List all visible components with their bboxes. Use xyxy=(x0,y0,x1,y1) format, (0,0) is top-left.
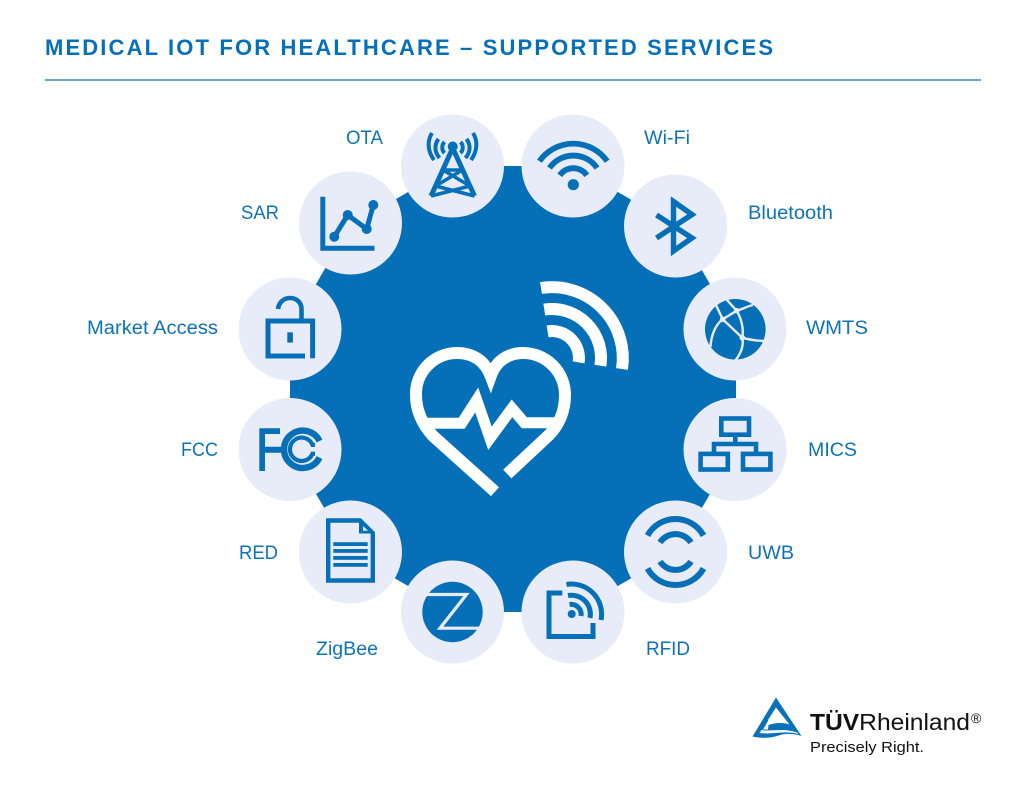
label: WMTS xyxy=(806,318,868,339)
tagline: Precisely Right. xyxy=(810,740,924,756)
service: Wi-Fi xyxy=(522,114,690,218)
service: SAR xyxy=(241,172,402,274)
label: UWB xyxy=(748,543,794,564)
label: FCC xyxy=(181,440,218,461)
icon: document xyxy=(328,519,374,580)
service: RED xyxy=(239,500,402,604)
icon: radio tower xyxy=(429,133,476,196)
service: RFID xyxy=(522,560,690,664)
icon: ultra-wideband arcs xyxy=(648,519,704,585)
label: MICS xyxy=(808,440,857,461)
service: Market Access xyxy=(87,278,342,380)
registered mark: ® xyxy=(971,710,982,726)
icon: network hierarchy xyxy=(701,418,770,470)
label: Wi-Fi xyxy=(644,128,690,149)
icon: line chart xyxy=(323,197,378,248)
service: WMTS xyxy=(684,278,868,380)
central icon: heart with pulse and wireless signal xyxy=(416,287,623,492)
icon: globe xyxy=(705,299,767,361)
service: FCC xyxy=(181,398,342,501)
wordmark: TÜVRheinland xyxy=(810,709,970,735)
label: OTA xyxy=(346,128,383,149)
label: RED xyxy=(239,543,278,564)
icon: RFID tag xyxy=(549,584,602,636)
central blue dodecagon panel xyxy=(290,166,736,612)
icon: FCC mark xyxy=(259,428,320,471)
service: Bluetooth xyxy=(624,174,833,278)
label: SAR xyxy=(241,203,279,224)
icon: wifi xyxy=(539,144,607,190)
label: RFID xyxy=(646,639,690,660)
label: ZigBee xyxy=(316,639,378,660)
logo triangle xyxy=(752,698,802,738)
icon: ZigBee mark xyxy=(422,582,483,642)
icon: bluetooth rune xyxy=(656,202,692,251)
icon: open padlock xyxy=(268,298,313,358)
service: ZigBee xyxy=(316,560,504,664)
title: MEDICAL IOT FOR HEALTHCARE – SUPPORTED SERVICES xyxy=(45,35,773,60)
service: MICS xyxy=(684,398,857,501)
service: OTA xyxy=(346,114,504,218)
label: Bluetooth xyxy=(748,203,833,224)
service: UWB xyxy=(624,500,794,604)
label: Market Access xyxy=(87,318,218,339)
logo: TÜV Rheinland xyxy=(752,698,982,756)
